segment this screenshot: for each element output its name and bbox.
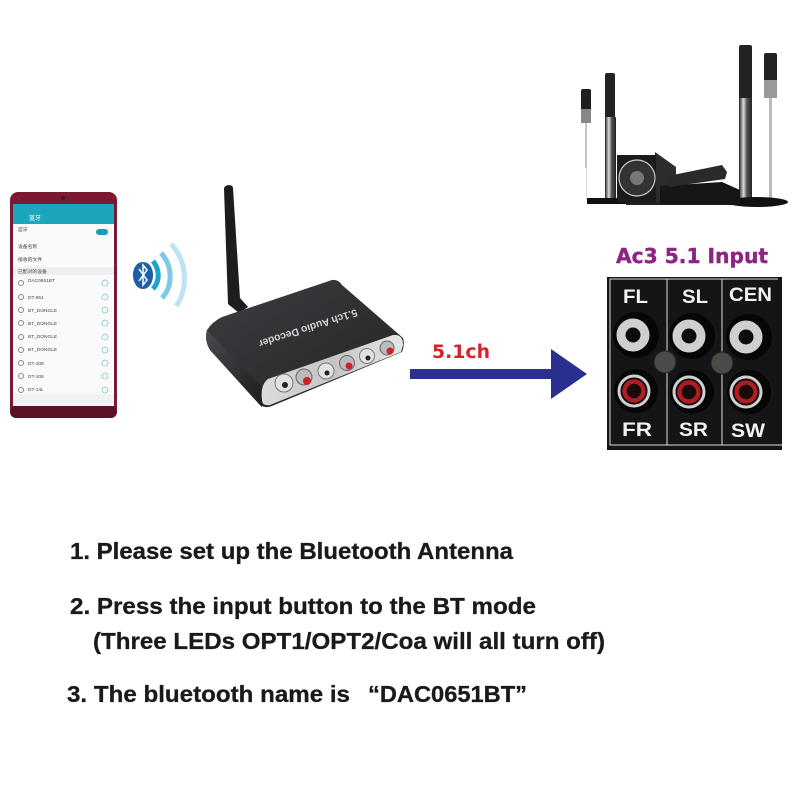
speaker base bbox=[587, 197, 788, 207]
channel labels: SL bbox=[682, 286, 708, 308]
settings rows: DT-14L bbox=[28, 387, 44, 393]
settings rows: 设备名称 bbox=[18, 243, 37, 250]
input heading: Ac3 5.1 Input bbox=[616, 244, 768, 268]
settings rows: BT_DONGLE bbox=[28, 308, 57, 314]
step 1: 1. Please set up the Bluetooth Antenna bbox=[70, 538, 513, 564]
settings rows: DT-108 bbox=[28, 374, 44, 380]
headphone icons bbox=[18, 280, 24, 392]
5.1ch label: 5.1ch bbox=[432, 342, 490, 363]
channel labels: FL bbox=[623, 286, 648, 308]
phone app header: 蓝牙 bbox=[29, 214, 41, 222]
channel labels: CEN bbox=[729, 284, 772, 306]
step 3 name: “DAC0651BT” bbox=[368, 681, 527, 707]
settings rows: DT-951 bbox=[28, 295, 44, 301]
RCA sockets bbox=[275, 341, 394, 392]
channel labels: SR bbox=[679, 419, 708, 441]
instructions bbox=[67, 538, 605, 707]
device label: 5.1ch Audio Decoder bbox=[257, 306, 359, 349]
settings rows: BT_DONGLE bbox=[28, 334, 57, 340]
step 3: 3. The bluetooth name is bbox=[67, 681, 350, 707]
panel screws bbox=[654, 351, 733, 374]
step 2: 2. Press the input button to the BT mode bbox=[70, 593, 536, 619]
settings rows: DT-108 bbox=[28, 361, 44, 367]
device row icons bbox=[102, 280, 108, 393]
far-left speaker bbox=[581, 89, 591, 200]
panel dividers over recesses bbox=[667, 279, 722, 445]
left tower speaker bbox=[605, 73, 616, 200]
red RCA sockets bbox=[624, 382, 756, 402]
channel labels: FR bbox=[622, 419, 652, 441]
white RCA sockets bbox=[621, 323, 758, 349]
bluetooth toggle bbox=[96, 229, 108, 235]
phone bbox=[10, 192, 117, 418]
receiver bbox=[660, 182, 740, 204]
center speaker bbox=[668, 165, 727, 187]
bluetooth signal icon bbox=[133, 244, 184, 306]
audio decoder device bbox=[206, 185, 404, 407]
settings rows: 接收的文件 bbox=[18, 256, 42, 263]
channel labels bbox=[622, 284, 772, 442]
settings rows: 蓝牙 bbox=[18, 226, 28, 233]
settings rows: BT_DONGLE bbox=[28, 347, 57, 353]
home theater speakers bbox=[581, 45, 788, 207]
settings rows bbox=[13, 226, 114, 393]
right tower speaker bbox=[739, 45, 752, 200]
arrow bbox=[410, 349, 587, 399]
settings rows: BT_DONGLE bbox=[28, 321, 57, 327]
subwoofer bbox=[617, 152, 676, 203]
channel labels: SW bbox=[731, 420, 766, 442]
settings rows: 已配对的设备 bbox=[18, 268, 47, 275]
rear input panel bbox=[607, 277, 782, 450]
silver front plate bbox=[262, 335, 403, 405]
far-right speaker bbox=[764, 53, 777, 198]
antenna bbox=[224, 185, 248, 313]
step 2 note: (Three LEDs OPT1/OPT2/Coa will all turn off) bbox=[93, 628, 605, 654]
phone app header bbox=[13, 204, 114, 224]
socket recesses bbox=[613, 312, 772, 414]
settings rows: DAC0651BT bbox=[28, 278, 55, 284]
